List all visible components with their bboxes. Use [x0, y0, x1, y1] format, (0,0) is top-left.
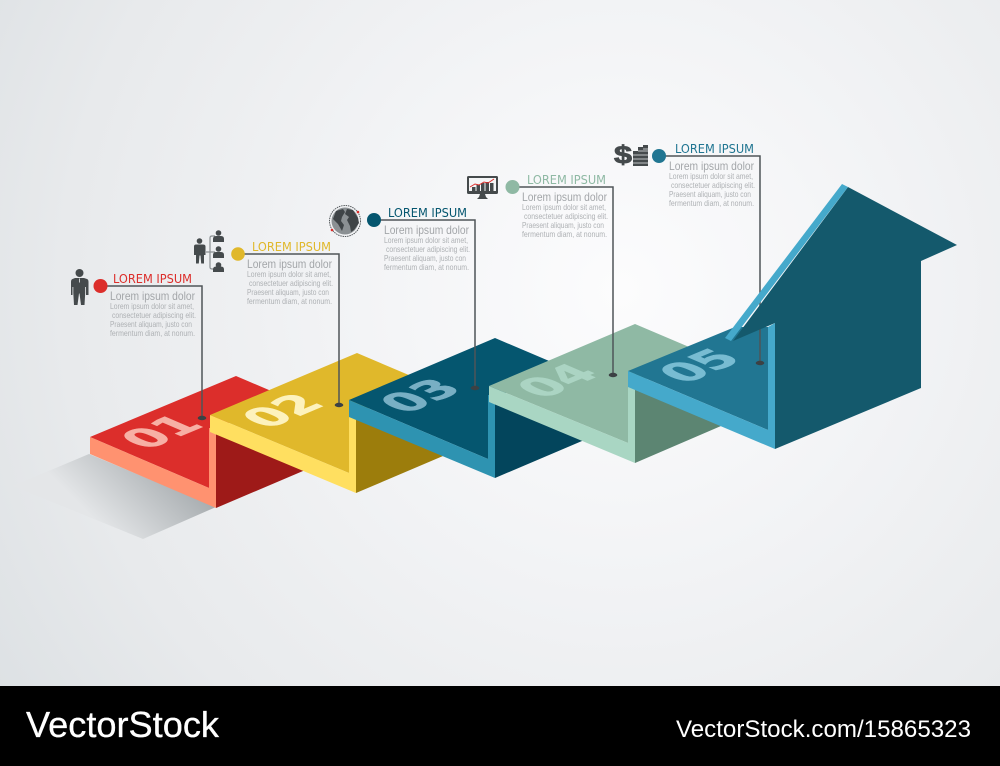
icon: dollar with bars: $: [614, 141, 632, 169]
footer bar: [0, 686, 1000, 766]
callout 3: Lorem ipsum dolor: [384, 223, 469, 237]
callout 3: consectetuer adipiscing elit.: [386, 244, 470, 254]
callout 1: [94, 272, 196, 338]
number 02: 02: [229, 388, 336, 434]
callout 1: LOREM IPSUM: [113, 272, 192, 286]
callout 3: Lorem ipsum dolor sit amet,: [384, 235, 468, 245]
callout 5: LOREM IPSUM: [675, 142, 754, 156]
icon: businessman: [71, 269, 88, 305]
leader line 2: [238, 254, 343, 407]
callout 3: LOREM IPSUM: [388, 206, 467, 220]
step 4: green: [489, 324, 730, 463]
callout 2: consectetuer adipiscing elit.: [249, 278, 333, 288]
number 05: 05: [646, 343, 753, 389]
number 04: 04: [504, 358, 611, 404]
icon: monitor chart: [467, 176, 498, 199]
icon: org chart: [194, 230, 224, 272]
number 01: 01: [108, 409, 215, 455]
leader line 3: [374, 220, 479, 390]
callout 1: consectetuer adipiscing elit.: [112, 310, 196, 320]
callout 1: Lorem ipsum dolor: [110, 289, 195, 303]
leader line 5: [659, 156, 764, 365]
callout 2: [231, 240, 333, 306]
callout 3: [367, 206, 470, 272]
callout 1: fermentum diam, at nonum.: [110, 328, 195, 338]
callout 2: Lorem ipsum dolor sit amet,: [247, 269, 331, 279]
callout 4: [506, 173, 608, 239]
callout 4: consectetuer adipiscing elit.: [524, 211, 608, 221]
number 03: 03: [367, 373, 474, 419]
icon: globe: [330, 206, 360, 236]
callout 4: fermentum diam, at nonum.: [522, 229, 607, 239]
callout 2: Praesent aliquam, justo con: [247, 287, 329, 297]
callout 4: LOREM IPSUM: [527, 173, 606, 187]
step 2: yellow: [210, 353, 450, 493]
callout 1: Praesent aliquam, justo con: [110, 319, 192, 329]
callout 2: Lorem ipsum dolor: [247, 257, 332, 271]
callout 5: Lorem ipsum dolor sit amet,: [669, 171, 753, 181]
callout 5: Lorem ipsum dolor: [669, 159, 754, 173]
leader line 1: [100, 286, 206, 420]
callout 5: fermentum diam, at nonum.: [669, 198, 754, 208]
callout 4: Lorem ipsum dolor: [522, 190, 607, 204]
leader line 4: [512, 187, 617, 377]
footer url: VectorStock.com/15865323: [676, 716, 971, 743]
callout 4: Praesent aliquam, justo con: [522, 220, 604, 230]
ground shadow: [13, 454, 216, 539]
arrow head: [725, 184, 957, 449]
callout 5: Praesent aliquam, justo con: [669, 189, 751, 199]
icon: dollar with bars: [614, 141, 648, 169]
callout 4: Lorem ipsum dolor sit amet,: [522, 202, 606, 212]
step 1: red: [90, 376, 310, 508]
footer logo: VectorStock: [26, 704, 220, 745]
callout 2: fermentum diam, at nonum.: [247, 296, 332, 306]
callout 3: Praesent aliquam, justo con: [384, 253, 466, 263]
callout 2: LOREM IPSUM: [252, 240, 331, 254]
step 5: plate: [628, 323, 775, 449]
callout 5: [652, 142, 755, 208]
step 3: dark blue: [349, 338, 590, 478]
callout 1: Lorem ipsum dolor sit amet,: [110, 301, 194, 311]
callout 5: consectetuer adipiscing elit.: [671, 180, 755, 190]
callout 3: fermentum diam, at nonum.: [384, 262, 469, 272]
